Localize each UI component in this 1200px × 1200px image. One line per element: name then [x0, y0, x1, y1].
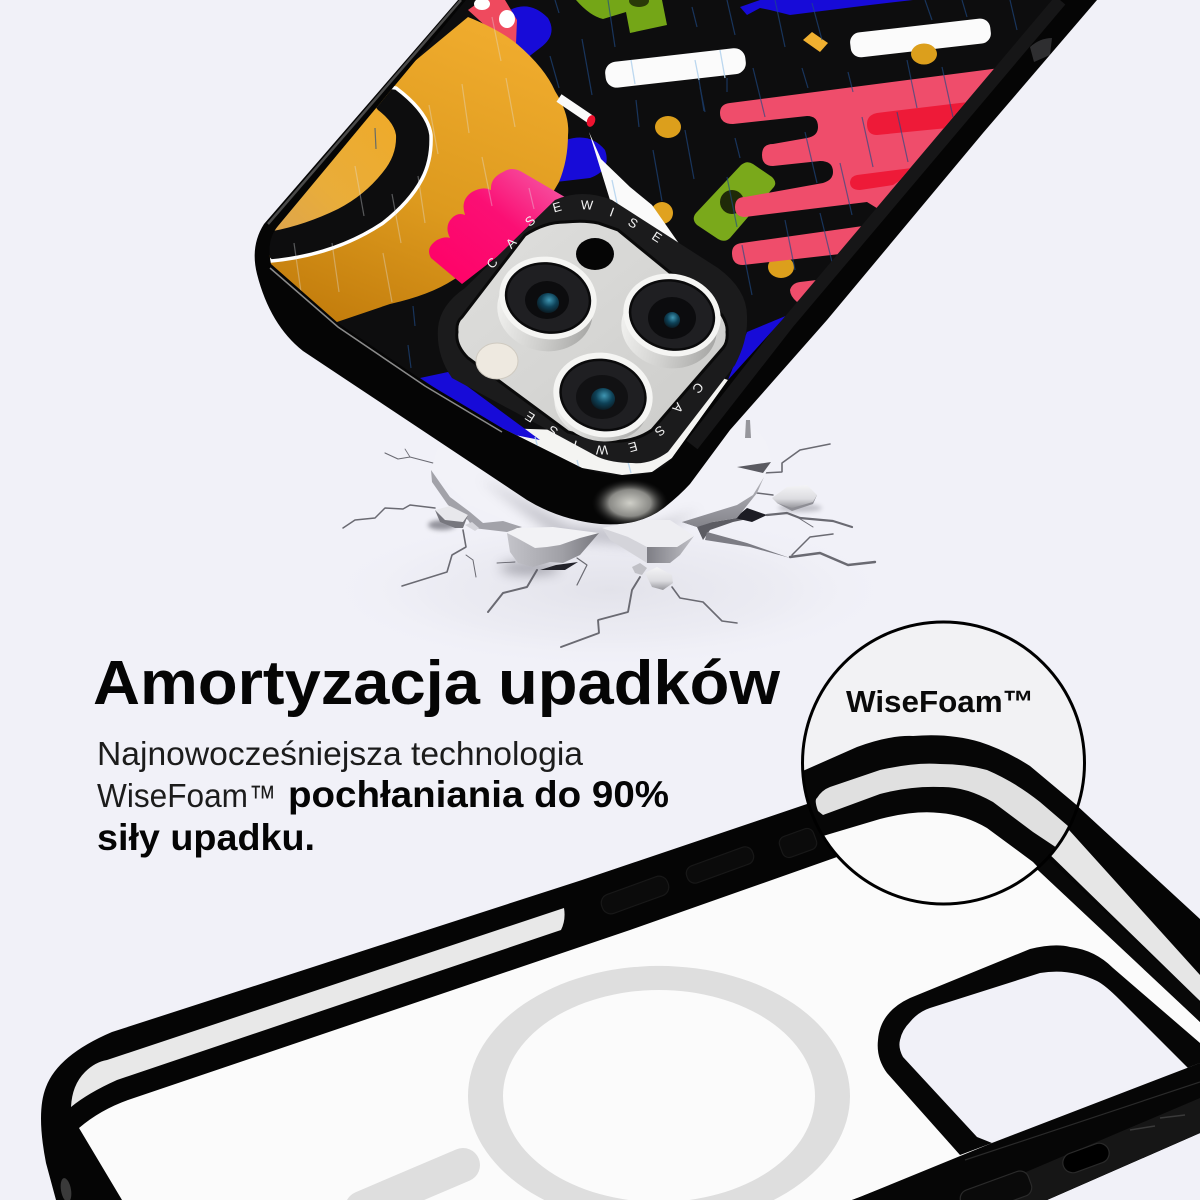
magsafe ring: [468, 966, 850, 1200]
ring lettering top: W: [580, 197, 594, 213]
ring lettering top: [483, 197, 665, 272]
camera plate: [457, 221, 727, 441]
ring lettering top: E: [551, 199, 563, 215]
shadow beneath the phone: [480, 478, 700, 545]
ring lettering bottom: E: [522, 408, 538, 426]
orange blob: [260, 17, 568, 323]
white lower strip: [502, 370, 728, 475]
right grey strip: [1040, 820, 1200, 1001]
magsafe pill: [362, 1165, 463, 1200]
ring lettering top: E: [649, 228, 665, 246]
ring lettering bottom: E: [627, 439, 639, 455]
small black sensor: [576, 238, 614, 270]
speaker hole: [59, 1177, 73, 1200]
ring lettering bottom: A: [669, 400, 687, 416]
black bumper: [41, 770, 1200, 1200]
description text: WiseFoam: [97, 777, 248, 814]
black arc with white outline: [250, 85, 431, 261]
red mushroom: [468, 0, 517, 44]
lens: bottom: [545, 344, 661, 450]
raised plate: [431, 425, 771, 528]
green shapes: [576, 0, 775, 241]
debris chunk 2: [602, 520, 694, 563]
pink cloud: [429, 169, 570, 284]
ring lettering bottom: W: [595, 442, 608, 458]
coral drip shape: [720, 68, 1000, 302]
debris chunk 1: [507, 527, 599, 567]
description text: Najnowocześniejsza technologia: [97, 735, 584, 772]
ring lettering bottom: S: [545, 422, 561, 440]
debris shadows: [428, 504, 822, 575]
description text: [97, 735, 669, 858]
white stick and blade: [559, 98, 680, 245]
lower frame edge: [852, 1063, 1200, 1200]
rock right: [772, 485, 817, 511]
circle outline: [802, 622, 1084, 904]
ring lettering bottom: I: [571, 437, 579, 453]
case bumper: [255, 0, 1097, 524]
flash: [476, 343, 518, 379]
side buttons: [599, 827, 1112, 1200]
description text: pochłaniania do 90%: [288, 774, 669, 815]
description text: ™: [249, 779, 276, 817]
ring lettering top: C: [483, 254, 501, 272]
gold coins: [651, 44, 937, 278]
right black inner band: [1025, 845, 1200, 1022]
rain lines: [375, 0, 1017, 368]
inner orange: [274, 108, 396, 231]
cracks: [343, 444, 875, 647]
lens: upper left: [490, 248, 604, 360]
magnified corner: [804, 735, 1076, 866]
ring lettering bottom: [522, 380, 707, 458]
ring lettering top: I: [608, 204, 616, 220]
small debris centre: [632, 563, 673, 590]
right plate wall and gap: [682, 420, 790, 558]
ring lettering top: S: [625, 214, 641, 232]
clear back panel: [79, 830, 1200, 1200]
left plate wall: [431, 470, 522, 532]
WiseFoam magnifier: [801, 620, 1086, 906]
gold diamond: [803, 32, 828, 52]
small debris left: [435, 506, 479, 531]
blue shapes: [420, 0, 913, 440]
camera opening: [878, 945, 1200, 1155]
white bars: [604, 18, 992, 89]
circle label: WiseFoam™: [846, 684, 1034, 719]
case artwork: [270, 0, 1052, 475]
description text: siły upadku.: [97, 817, 315, 858]
bottom clear phone case: [41, 770, 1200, 1200]
ring lettering top: S: [522, 212, 538, 230]
ring lettering bottom: S: [652, 422, 668, 440]
camera ring: [438, 194, 747, 463]
lens: right: [614, 265, 728, 377]
ring lettering top: A: [503, 234, 520, 251]
title: Amortyzacja upadków: [93, 649, 781, 718]
top phone with patterned case: [250, 0, 1100, 527]
impact crater: [320, 420, 900, 670]
ring lettering bottom: C: [689, 380, 707, 396]
left grey strip: [71, 908, 565, 1107]
